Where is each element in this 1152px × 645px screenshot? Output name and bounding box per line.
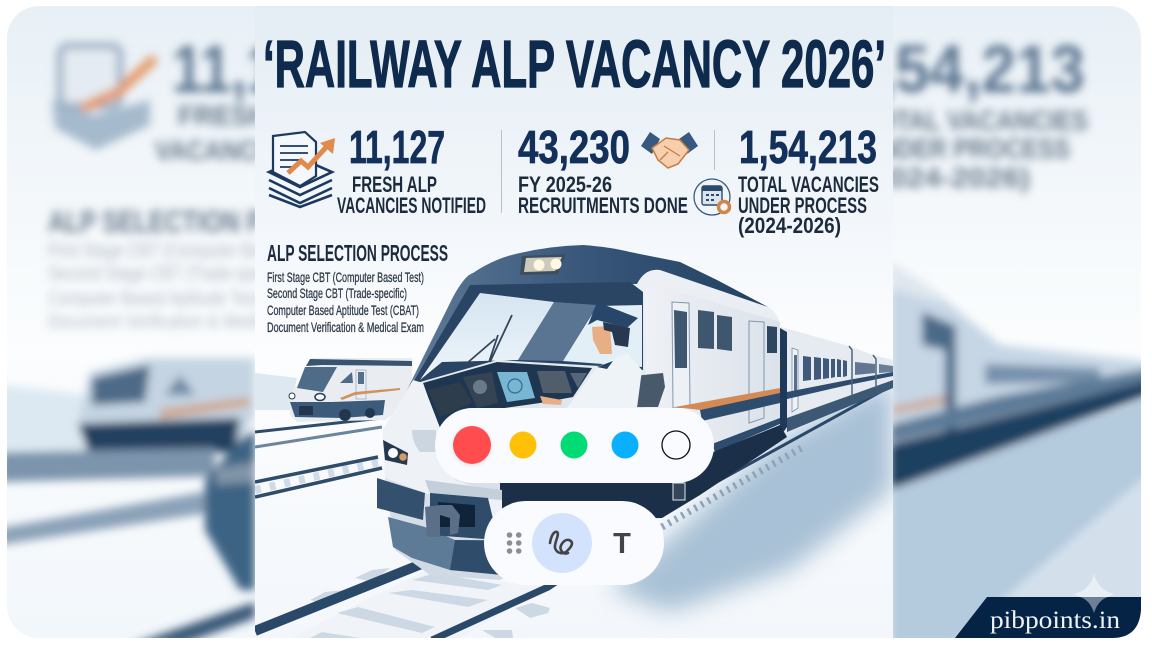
watermark badge: pibpoints.in bbox=[990, 607, 1121, 634]
backdrop left icon bbox=[52, 46, 155, 150]
blurred backdrop: FRESH ALP bbox=[178, 100, 328, 131]
stat: fresh vacancies: 11,127 bbox=[349, 121, 445, 173]
blurred backdrop: First Stage CBT (Computer Based Test) bbox=[48, 240, 323, 262]
side stripes bbox=[675, 328, 787, 452]
dark roof bbox=[404, 245, 768, 396]
stat: total vacancies bbox=[738, 121, 879, 238]
icon: handshake bbox=[641, 132, 698, 168]
stat: fresh vacancies bbox=[337, 130, 486, 213]
blurred backdrop: 11,127 bbox=[172, 32, 340, 107]
selection process list bbox=[267, 240, 448, 335]
front track rails and sleepers bbox=[255, 385, 893, 640]
stat: recruitments done: RECRUITMENTS DONE bbox=[518, 193, 688, 218]
headlamp on roof bbox=[520, 254, 566, 275]
selection process list: Second Stage CBT (Trade-specific) bbox=[267, 285, 407, 301]
drawing tool toolbar: T bbox=[613, 528, 631, 560]
stat: recruitments done bbox=[518, 130, 688, 213]
blurred backdrop: ALP SELECTION PROCESS bbox=[48, 204, 364, 239]
stat: total vacancies: TOTAL VACANCIES bbox=[738, 172, 879, 197]
train illustration bbox=[255, 6, 893, 640]
drawing tool toolbar bbox=[484, 501, 664, 585]
blurred backdrop: TOTAL VACANCIES bbox=[862, 105, 1088, 136]
stat: total vacancies: 1,54,213 bbox=[739, 121, 877, 173]
dashboard bbox=[423, 362, 592, 428]
cab lower front bbox=[377, 380, 502, 575]
second train bbox=[289, 358, 412, 422]
distant tracks bbox=[255, 418, 382, 497]
main cab body bbox=[383, 245, 780, 580]
blurred backdrop: Second Stage CBT (Trade-specific) bbox=[48, 263, 293, 285]
colour picker toolbar bbox=[435, 408, 714, 483]
blurred backdrop: VACANCIES NOTIFIED bbox=[155, 135, 415, 166]
blurred backdrop: 1,54,213 bbox=[843, 32, 1085, 107]
undercarriage bbox=[500, 425, 787, 520]
central infographic panel bbox=[255, 6, 893, 640]
blurred backdrop: Document Verification & Medical Exam bbox=[48, 311, 323, 333]
blurred backdrop: (2024-2026) bbox=[862, 162, 1030, 193]
stat: recruitments done: 43,230 bbox=[518, 121, 630, 173]
windscreen frame bbox=[413, 282, 643, 382]
watermark badge bbox=[955, 574, 1141, 638]
side door and windows bbox=[672, 302, 777, 423]
backdrop right scenery bbox=[890, 262, 1152, 645]
side panel bbox=[645, 308, 780, 408]
trailing carriages bbox=[781, 327, 893, 432]
selection process list: Computer Based Aptitude Test (CBAT) bbox=[267, 302, 419, 318]
stat: recruitments done: FY 2025-26 bbox=[518, 172, 612, 197]
backdrop left scenery bbox=[0, 358, 255, 645]
stat: total vacancies: (2024-2026) bbox=[738, 213, 841, 238]
selection process list: First Stage CBT (Computer Based Test) bbox=[267, 269, 424, 285]
selection process list: ALP SELECTION PROCESS bbox=[267, 240, 448, 266]
blurred backdrop: UNDER PROCESS bbox=[862, 133, 1070, 164]
icon: documents with rising arrow bbox=[269, 132, 335, 207]
stat: total vacancies: UNDER PROCESS bbox=[738, 193, 867, 218]
selection process list: Document Verification & Medical Exam bbox=[267, 319, 424, 335]
blurred backdrop: Computer Based Aptitude Test (CBAT) bbox=[48, 288, 314, 310]
seat bbox=[637, 373, 665, 407]
icon: calendar and gear bbox=[694, 179, 730, 215]
stat: fresh vacancies: FRESH ALP bbox=[352, 172, 437, 197]
stat: fresh vacancies: VACANCIES NOTIFIED bbox=[337, 193, 486, 218]
driver bbox=[540, 302, 642, 408]
